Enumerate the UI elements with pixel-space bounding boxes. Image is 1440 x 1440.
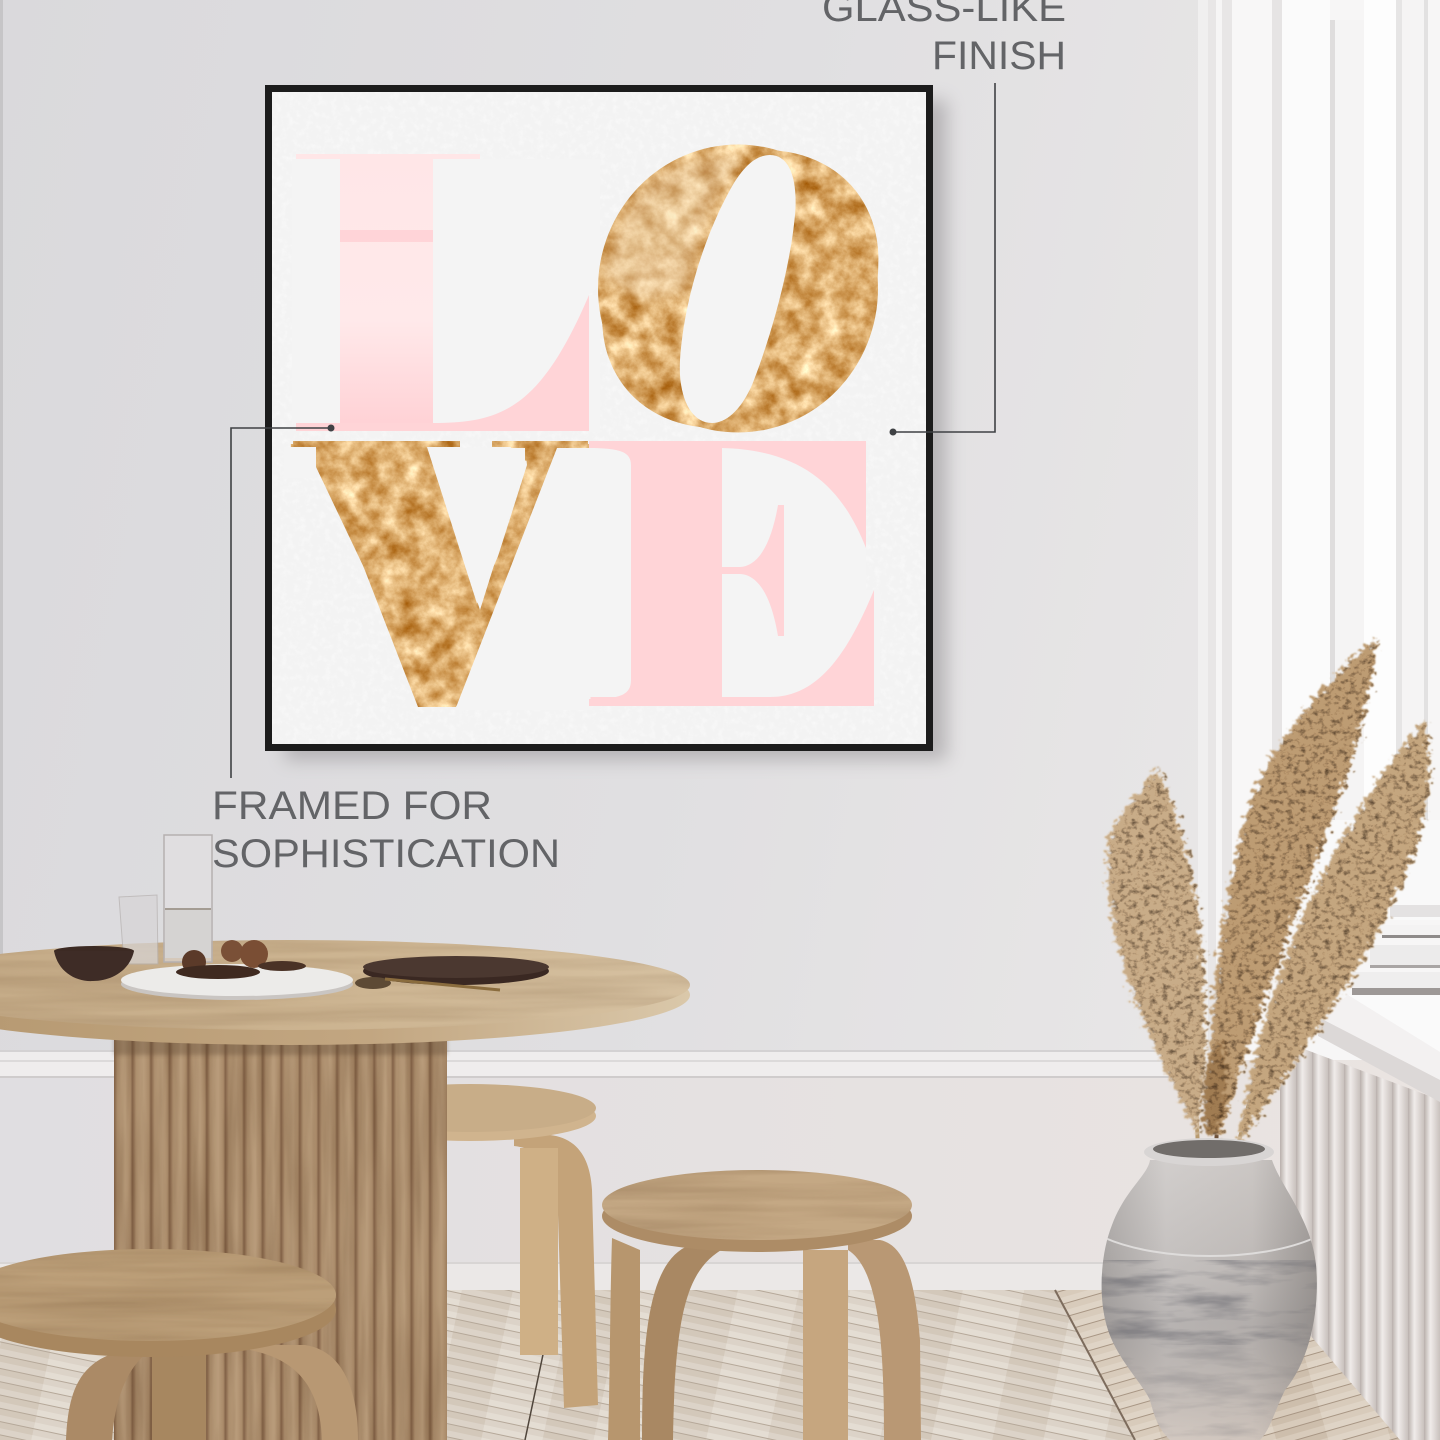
leader line [231,428,331,778]
sparkle background [272,92,926,744]
pale gold leaf patch [602,156,745,300]
LOVE letters [290,144,878,707]
letter L: L [288,58,611,523]
pampas grass stems [1196,1100,1250,1152]
table top [0,940,690,1045]
carafe and glass [119,835,212,964]
letter E: E [583,350,888,790]
right stool [602,1170,921,1440]
nuts [176,940,306,979]
callout: glass-like finish [822,0,1066,436]
front left stool [0,1249,358,1440]
label text: FINISH [932,34,1066,78]
books on sill [1352,925,1440,995]
frame [268,88,930,748]
leader line [893,83,995,432]
back stool [344,1084,598,1408]
brass spoons [355,977,500,990]
window frame and trim [1198,0,1440,1060]
frame shadow [285,100,947,760]
plume: right [1238,720,1430,1148]
dark wooden plate [363,956,549,985]
radiator [1280,1040,1440,1440]
pampas grass plumes [1107,640,1430,1148]
skirting board [0,1262,1200,1290]
stone vase [1095,1138,1325,1440]
dark bowl [54,946,134,981]
window sill [1318,995,1440,1102]
letter V: V [286,353,599,785]
floor [0,1290,1440,1440]
leader dot [890,428,896,436]
plume: left [1107,768,1206,1135]
plume: back centre [1208,640,1378,1135]
marble board [121,964,353,1000]
label text: SOPHISTICATION [212,832,560,876]
dado rail moulding [0,1050,1200,1078]
leader dot [328,424,334,432]
letter O [598,144,878,432]
callout: framed for sophistication [212,424,560,876]
plume: small centre [1204,1040,1228,1135]
vase rim [1144,1138,1274,1166]
framed artwork [268,56,947,790]
table pedestal [114,1035,447,1440]
label text: FRAMED FOR [212,784,492,828]
letter O: O [587,56,890,514]
